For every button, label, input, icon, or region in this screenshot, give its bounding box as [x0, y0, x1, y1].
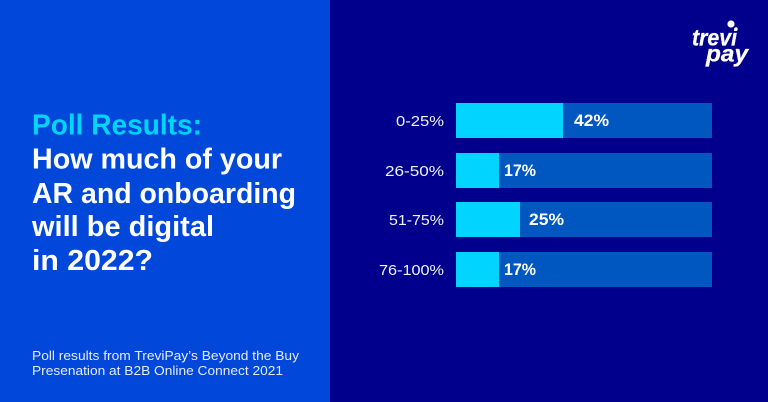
logo dot small: [734, 27, 738, 31]
row: 26-50%: [385, 153, 712, 188]
bar value: [456, 153, 499, 188]
panel: left background: [0, 0, 330, 402]
logo: TreviPay: [692, 20, 749, 66]
bar track: [456, 153, 712, 188]
value label: 17%: [504, 162, 536, 180]
value label: 25%: [529, 211, 564, 229]
category label: 0-25%: [396, 113, 444, 130]
panel: right background: [330, 0, 768, 402]
heading: question line 3: will be digital: [31, 211, 214, 243]
bar track: [456, 252, 712, 287]
bar value: [456, 202, 520, 237]
heading: poll results: Poll Results:: [32, 110, 202, 142]
row: 51-75%: [389, 202, 712, 237]
heading: question line 4: in 2022?: [32, 245, 153, 277]
logo word pay: pay: [705, 40, 749, 66]
source note line 1: Poll results from TreviPay’s Beyond the Buy: [32, 348, 300, 363]
heading: question line 1: How much of your: [32, 144, 282, 176]
logo dot large: [727, 20, 735, 28]
row: 0-25%: [396, 103, 712, 138]
bar track: [456, 103, 712, 138]
heading: [31, 110, 296, 277]
bar value: [456, 252, 499, 287]
logo word trevi: trevi: [692, 24, 738, 50]
category label: 26-50%: [385, 163, 444, 180]
row: 76-100%: [379, 252, 712, 287]
category label: 51-75%: [389, 212, 444, 229]
source note: [32, 348, 300, 378]
bar value: [456, 103, 563, 138]
source note line 2: Presenation at B2B Online Connect 2021: [32, 363, 283, 378]
value label: 17%: [504, 261, 536, 279]
heading: question line 2: AR and onboarding: [32, 178, 296, 210]
bar chart: [379, 103, 712, 287]
value label: 42%: [574, 112, 609, 130]
category label: 76-100%: [379, 262, 444, 279]
bar track: [456, 202, 712, 237]
